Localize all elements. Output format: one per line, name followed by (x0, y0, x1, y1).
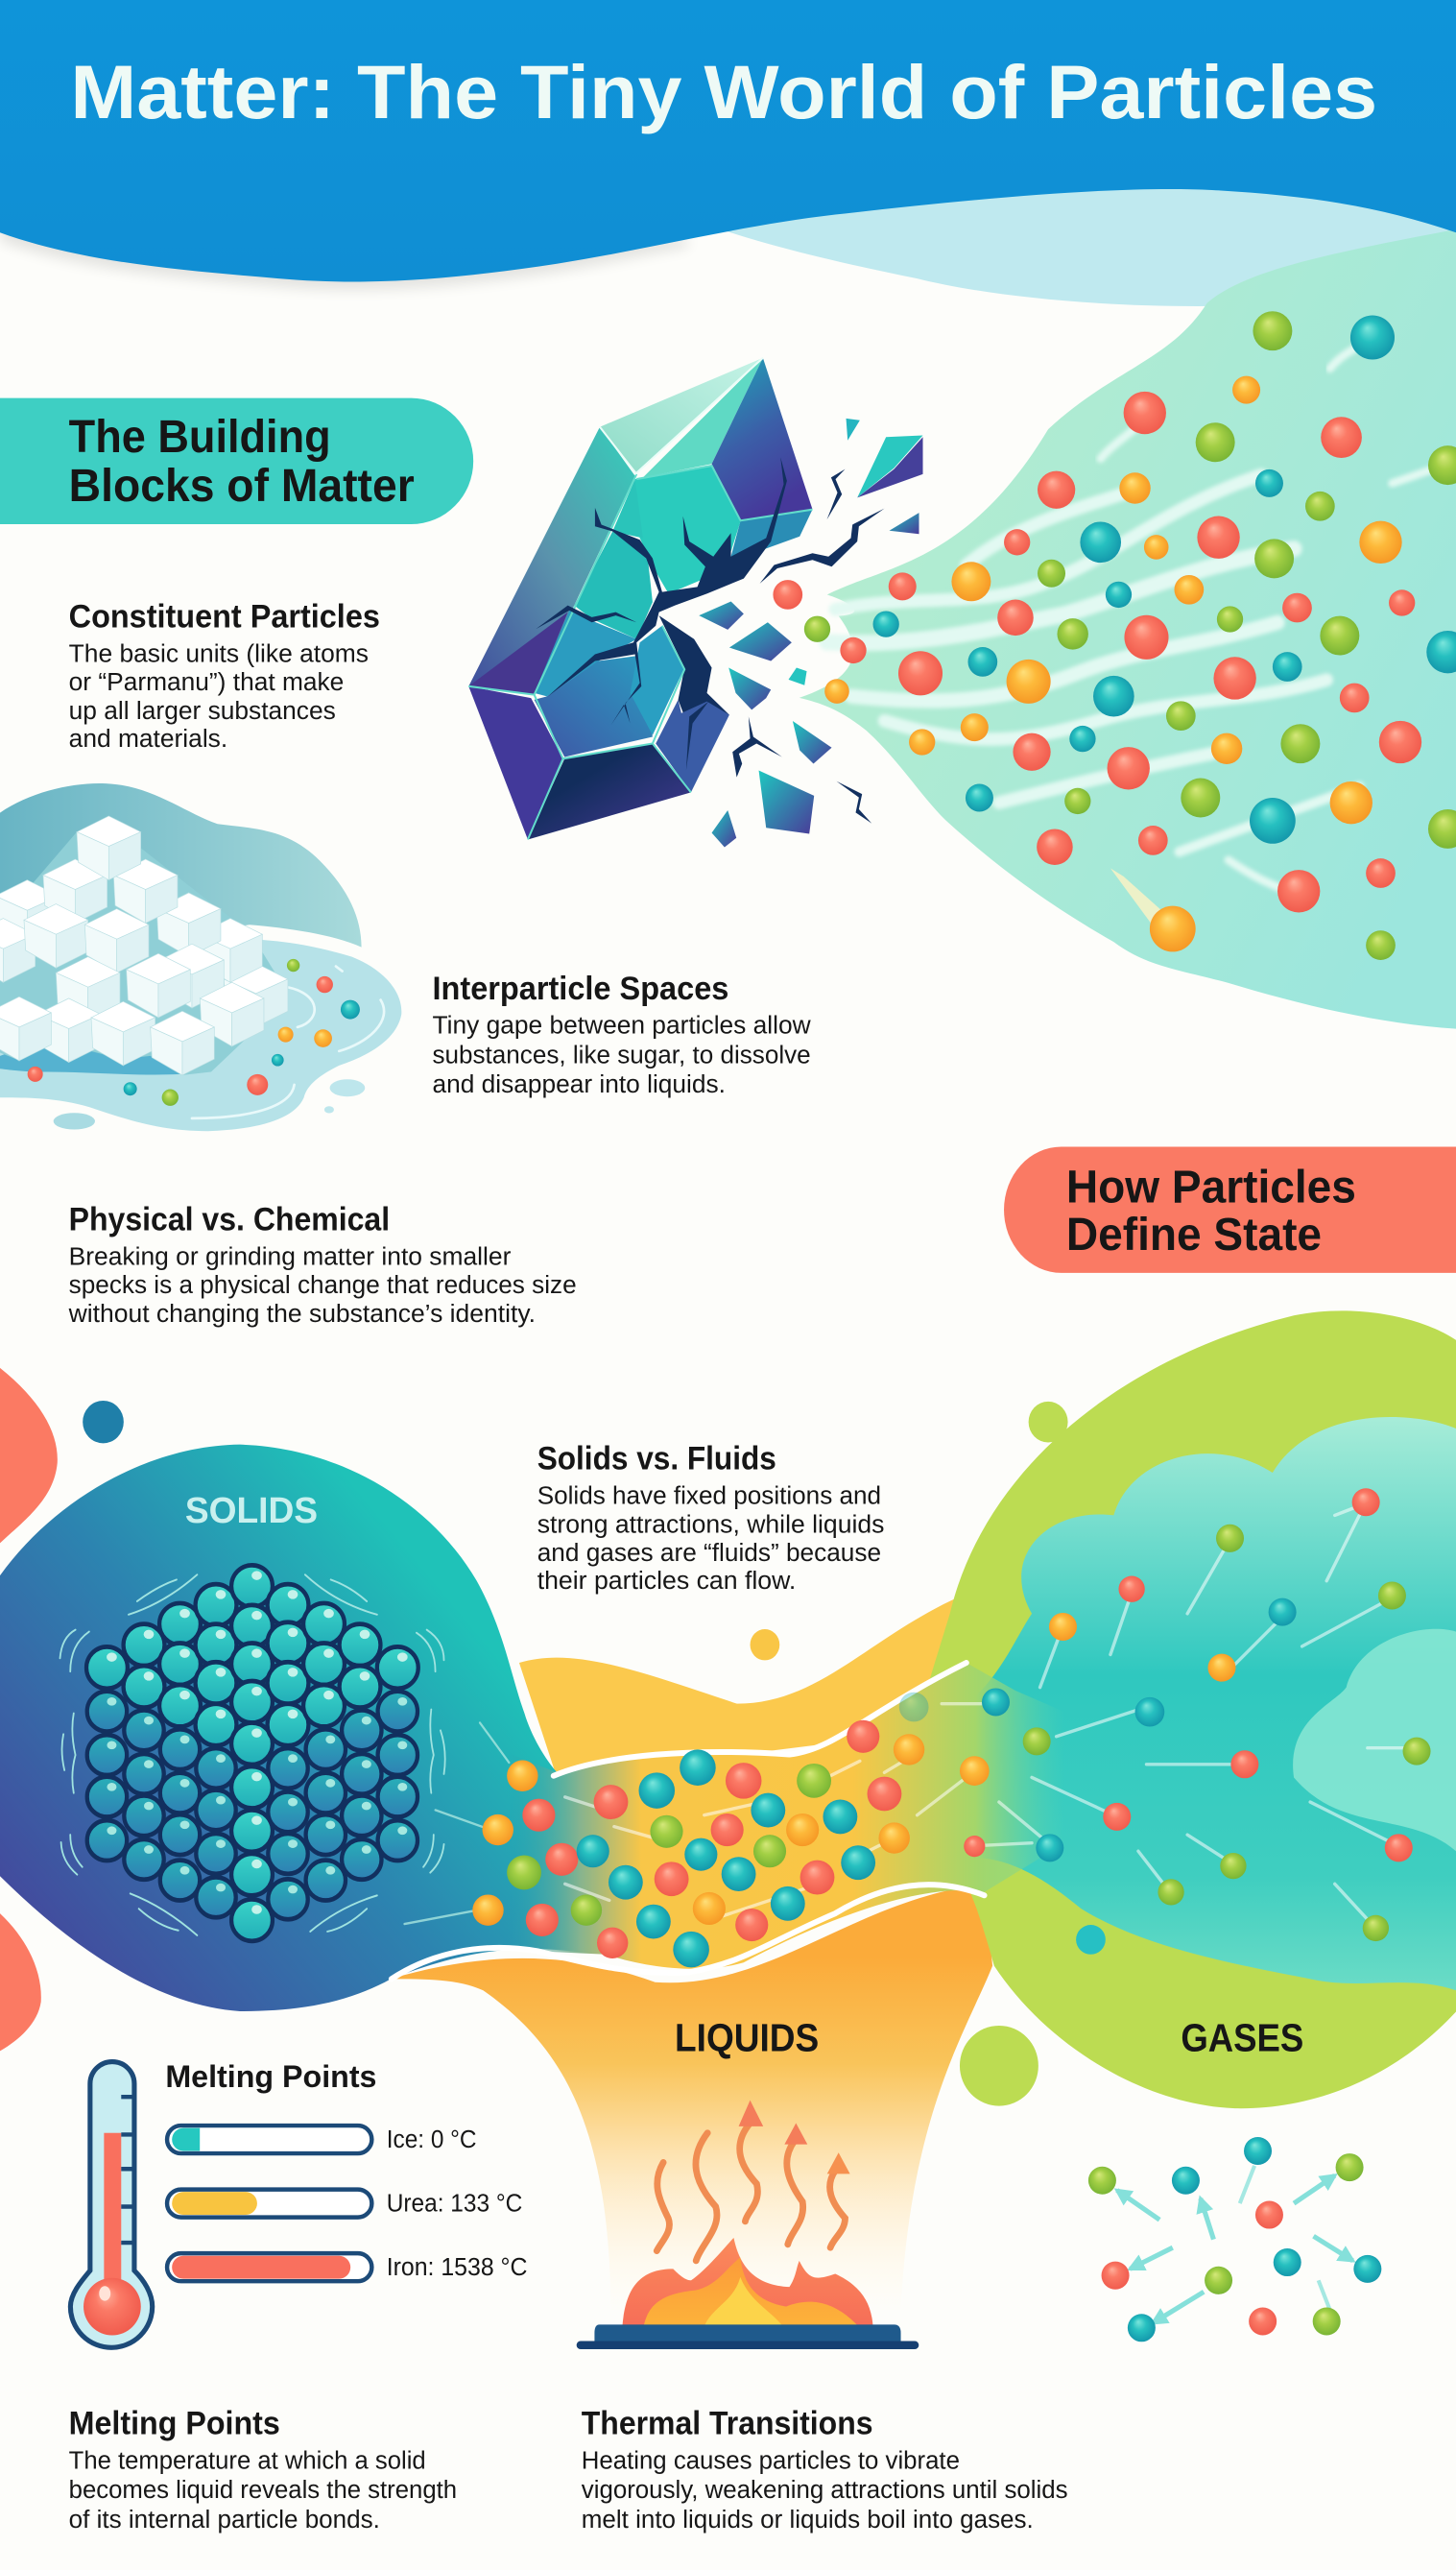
decorative dot: yellow (751, 1629, 779, 1660)
text block: physical vs chemical (68, 1202, 577, 1328)
pill heading: how particles define state: How Particles (1066, 1162, 1356, 1213)
bar: urea: Urea: 133 °C (387, 2191, 522, 2218)
text block: interparticle spaces: substances, like sugar, to dissolve (432, 1042, 811, 1069)
text block: interparticle spaces: Tiny gape between particles allow (432, 1013, 811, 1040)
pill heading: how particles define state: Define State (1066, 1210, 1322, 1261)
text block: melting points: becomes liquid reveals the strength (69, 2477, 457, 2504)
bar: ice (167, 2126, 477, 2153)
text block: thermal transitions: melt into liquids or liquids boil into gases. (582, 2507, 1034, 2534)
solids label: SOLIDS (185, 1490, 318, 1530)
gas cloud (918, 1417, 1456, 1990)
panel: liquid funnel (390, 1597, 999, 2310)
pill heading: how particles define state (1004, 1146, 1456, 1273)
decorative coral blob top (0, 1368, 58, 1543)
text block: physical vs chemical: without changing the substance’s identity. (68, 1301, 536, 1328)
flow particles (472, 1693, 990, 1967)
decorative blob: green (960, 2026, 1038, 2106)
header banner (0, 0, 1456, 290)
icon: sugar cubes dissolving (0, 783, 401, 1131)
text block: physical vs chemical: Physical vs. Chemical (69, 1202, 390, 1238)
pill heading: building blocks: Blocks of Matter (69, 461, 415, 512)
text block: melting points: The temperature at which a solid (69, 2448, 426, 2475)
text block: solids vs fluids: their particles can flow. (537, 1568, 796, 1595)
pill heading: building blocks (0, 398, 473, 524)
text block: interparticle spaces: Interparticle Spaces (432, 971, 728, 1007)
text block: melting points (69, 2406, 457, 2534)
text block: constituent particles: Constituent Particles (69, 599, 380, 636)
gas particles (982, 1488, 1431, 1955)
light cyan wave under header (721, 185, 1456, 306)
chart: melting points bars (165, 2059, 527, 2281)
bar: ice: Ice: 0 °C (387, 2126, 477, 2153)
text block: constituent particles: The basic units (like atoms (69, 640, 369, 667)
text block: constituent particles: or “Parmanu”) that make (69, 669, 344, 696)
icon: dispersing gas particles with arrows (1088, 2137, 1381, 2342)
icon: thermometer (70, 2062, 153, 2347)
icon: flame and burner (577, 2238, 919, 2349)
panel: gases blob (918, 1310, 1456, 2108)
stream particles (773, 311, 1456, 960)
text block: interparticle spaces: and disappear into liquids. (432, 1071, 726, 1098)
text block: melting points: of its internal particle bonds. (69, 2507, 380, 2534)
text block: thermal transitions: vigorously, weakening attractions until solids (582, 2477, 1068, 2504)
bar: iron (167, 2253, 527, 2281)
text block: melting points: Melting Points (69, 2406, 280, 2442)
bar: iron: Iron: 1538 °C (387, 2254, 527, 2281)
panel: solids blob (0, 1445, 589, 2011)
text block: constituent particles: and materials. (69, 726, 227, 753)
text block: solids vs fluids: strong attractions, while liquids (537, 1511, 884, 1538)
title: Matter: The Tiny World of Particles (70, 50, 1377, 134)
text block: solids vs fluids: and gases are “fluids” because (537, 1540, 881, 1567)
text block: solids vs fluids: Solids have fixed positions and (537, 1482, 881, 1509)
text block: thermal transitions: Heating causes particles to vibrate (582, 2448, 960, 2475)
decorative dot: teal (83, 1401, 124, 1443)
text block: thermal transitions: Thermal Transitions (582, 2406, 873, 2442)
gas label: GASES (1181, 2015, 1303, 2059)
pill heading: building blocks: The Building (69, 412, 331, 463)
decorative dot: green (1029, 1402, 1068, 1442)
text block: physical vs chemical: specks is a physical change that reduces size (69, 1272, 577, 1299)
panel: mint particle stream (800, 229, 1456, 1029)
text block: interparticle spaces (432, 971, 811, 1098)
particle lattice (86, 1565, 418, 1941)
text block: solids vs fluids: Solids vs. Fluids (537, 1441, 776, 1477)
text block: physical vs chemical: Breaking or grinding matter into smaller (69, 1243, 512, 1270)
icon: cracking crystal (468, 358, 923, 848)
text block: solids vs fluids (537, 1441, 884, 1595)
text block: constituent particles: up all larger substances (69, 698, 336, 725)
panel: liquid flow band (392, 1507, 1412, 1979)
decorative coral blob bottom (0, 1913, 41, 2051)
bar: urea (167, 2190, 522, 2218)
text block: constituent particles (69, 599, 380, 753)
text block: thermal transitions (582, 2406, 1068, 2534)
chart: melting points bars: Melting Points (165, 2059, 376, 2094)
second cloud (1293, 1629, 1456, 1851)
liquids label: LIQUIDS (675, 2015, 819, 2059)
icon: heat waves (656, 2101, 850, 2261)
